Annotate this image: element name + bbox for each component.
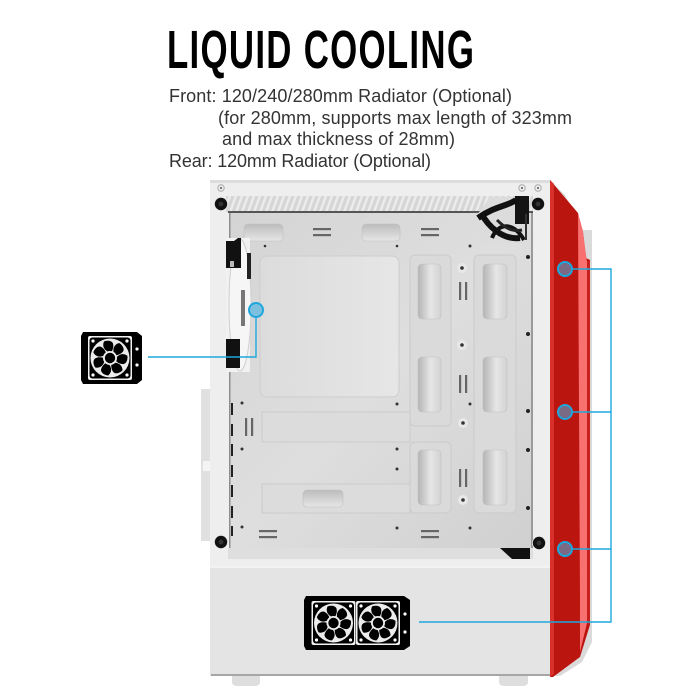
standoffs and small holes (240, 244, 472, 530)
tray cutouts (244, 224, 507, 507)
callout dot: front middle (558, 405, 572, 419)
tray slots (245, 228, 467, 538)
icon: single fan radiator (81, 332, 142, 384)
callout lines (148, 269, 611, 622)
feet (232, 675, 528, 686)
red front bezel (550, 180, 590, 677)
PC case (201, 180, 592, 686)
recessed square panel (260, 256, 399, 397)
text block: radiator support: (for 280mm, supports max length of 323mm (218, 108, 572, 128)
motherboard tray (229, 213, 533, 548)
rear bracket plate (201, 389, 211, 541)
case frame (210, 180, 550, 576)
grey side panel behind front bezel (550, 180, 592, 676)
text block: radiator support: Front: 120/240/280mm Radiator (Optional) (169, 86, 512, 106)
raised tray sections (262, 255, 516, 513)
callout dot: front top (558, 262, 572, 276)
corner screws (214, 185, 546, 550)
text block: radiator support: and max thickness of 28mm) (222, 129, 455, 149)
side clip (203, 461, 211, 471)
right edge slots (526, 255, 530, 510)
text block: radiator support (169, 86, 572, 171)
callout dot: front bottom (558, 542, 572, 556)
top grill (226, 196, 533, 212)
text block: radiator support: Rear: 120mm Radiator (Optional) (169, 151, 431, 171)
rear fan (226, 238, 251, 372)
icon: dual fan radiator (304, 596, 410, 650)
bottom grill (228, 548, 533, 559)
callout dot: rear (249, 303, 263, 317)
title: LIQUID COOLING (167, 19, 475, 80)
cable bundle (476, 196, 529, 243)
left edge slots (231, 403, 233, 536)
case base (210, 566, 550, 676)
